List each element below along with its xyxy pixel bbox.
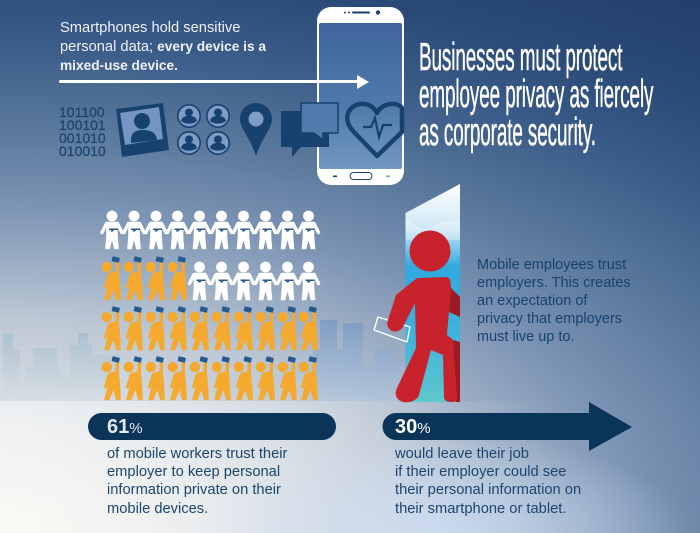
stat 30% description: if their employer could see: [395, 464, 566, 480]
stat 61%: 61%: [107, 416, 143, 438]
stat 30% description: their personal information on: [395, 482, 581, 498]
trust text: employers. This creates: [477, 275, 631, 291]
binary digits: 100101: [59, 117, 106, 133]
trust text: [477, 257, 631, 345]
headline: [419, 36, 654, 154]
binary digits: [59, 104, 106, 159]
stat 61% description: employer to keep personal: [107, 464, 280, 480]
trust text: Mobile employees trust: [477, 257, 626, 273]
icon: contacts: [178, 105, 229, 154]
ground band: [0, 401, 560, 533]
intro text: mixed-use device.: [60, 58, 178, 73]
trust text: must live up to.: [477, 329, 575, 345]
stat 61% description: mobile devices.: [107, 501, 208, 517]
stat 30%: 30%: [395, 416, 431, 438]
intro text: personal data; every device is a: [60, 39, 266, 55]
red person with phone: [374, 230, 460, 402]
row 3 orange: [102, 306, 317, 350]
icon: heart: [347, 104, 402, 156]
icon: chat bubbles: [281, 103, 338, 157]
doorway: [406, 184, 460, 402]
skyline background: [3, 320, 404, 401]
intro text: [60, 20, 266, 73]
row 2 mixed: [102, 256, 318, 300]
stat 61% description: of mobile workers trust their: [107, 446, 287, 462]
headline: Businesses must protect: [419, 36, 622, 78]
stat 30% description: their smartphone or tablet.: [395, 501, 566, 517]
61% bar: [88, 413, 336, 440]
icon: held phone: [374, 317, 410, 342]
binary digits: 101100: [59, 104, 105, 120]
binary digits: 001010: [59, 130, 106, 146]
intro text: Smartphones hold sensitive: [60, 20, 240, 36]
stat 61% description: [107, 446, 288, 517]
stat 30% description: would leave their job: [395, 446, 529, 462]
trust text: privacy that employers: [477, 311, 622, 327]
trust text: an expectation of: [477, 293, 587, 309]
icon: location pin: [240, 103, 272, 156]
binary digits: 010010: [59, 143, 106, 159]
headline: employee privacy as fiercely: [419, 73, 653, 116]
30% arrow: [382, 402, 632, 451]
smartphone: [317, 7, 404, 185]
stat 61% description: information private on their: [107, 482, 281, 498]
row 1 white: [102, 211, 318, 249]
row 4 orange: [102, 356, 317, 400]
icon: photo: [116, 103, 169, 157]
arrow: white arrow into phone: [59, 75, 369, 89]
stat 30% description: [395, 446, 581, 517]
people chart: [102, 211, 318, 400]
headline: as corporate security.: [419, 110, 596, 154]
